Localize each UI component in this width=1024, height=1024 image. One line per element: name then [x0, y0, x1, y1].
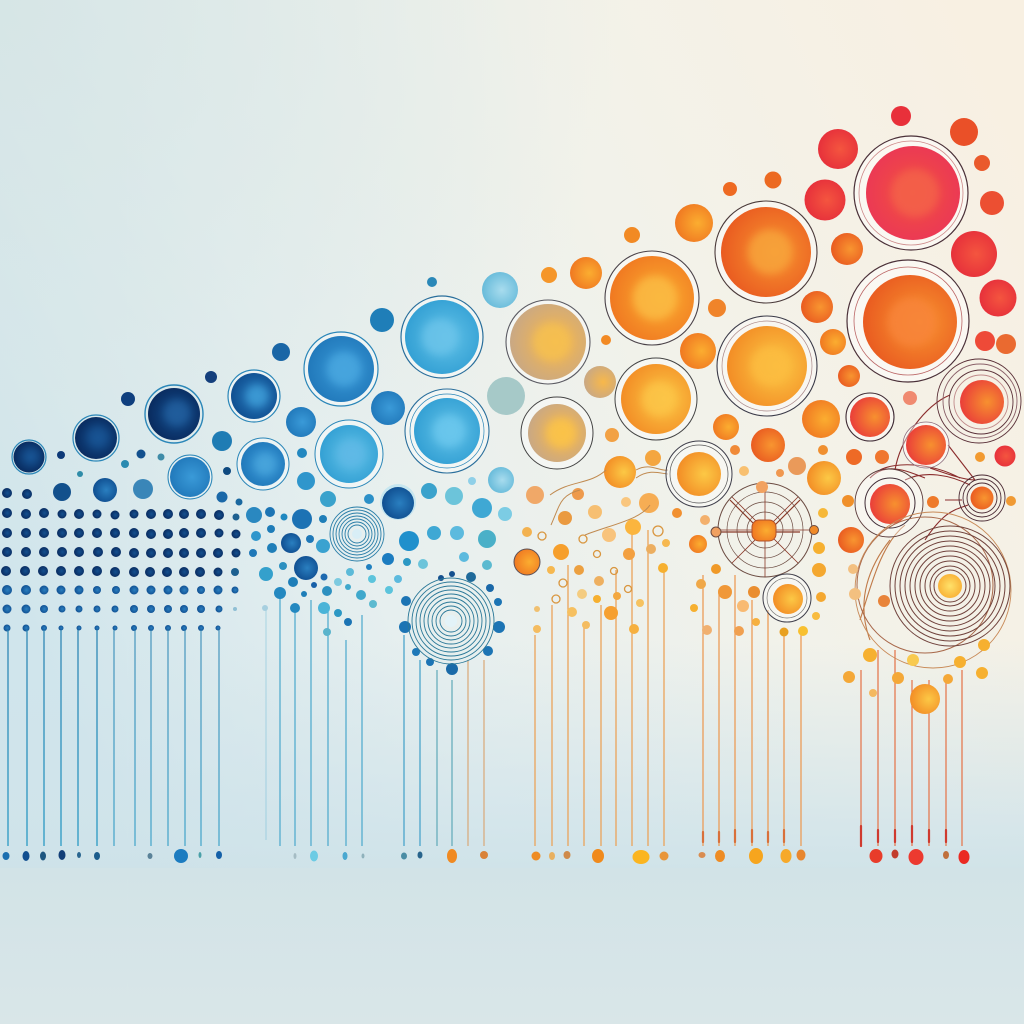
vertical lines: orange group 5	[703, 575, 801, 846]
ring circle navy 3	[145, 385, 203, 443]
ring circle blue 5	[304, 332, 378, 406]
ringed circle: amber lower	[763, 574, 811, 622]
ring circle amber	[521, 397, 593, 469]
scattered dots: gold below spiral	[843, 564, 990, 714]
hollow rings: small orange	[538, 526, 663, 603]
ring circle dark orange 9	[715, 201, 817, 303]
vertical lines: red group 6	[861, 650, 962, 846]
ring circle blue 4	[228, 370, 280, 422]
vertical lines: orange group 4	[535, 530, 664, 846]
bottom drops row	[2, 848, 970, 865]
ringed circle: orange red with loop	[855, 469, 923, 537]
ring circle amber grey 7	[506, 300, 590, 384]
ring circle orange large	[717, 316, 817, 416]
ring circle red orange large	[847, 260, 969, 382]
dot grid: fading blue rows	[2, 585, 238, 632]
ringed circle: red mid	[903, 422, 949, 468]
ring circle red 10	[854, 136, 968, 250]
ring circle mid blue	[237, 438, 289, 490]
ring circle navy 1	[12, 440, 46, 474]
connector curves: red cluster	[850, 395, 975, 640]
vertical lines: blue group 1	[8, 630, 219, 846]
spiral: large blue	[408, 578, 494, 664]
connector curves: orange cluster	[550, 467, 800, 535]
ring circle navy 2	[73, 415, 119, 461]
ring circle sky blue	[405, 389, 489, 473]
ringed circles: navy and blue upper row	[12, 136, 968, 474]
vertical lines: blue group 2	[266, 596, 362, 846]
dot grid: navy matrix	[1, 488, 240, 577]
web wheel node	[711, 481, 818, 577]
ring circle light blue	[315, 420, 383, 488]
ringed circle: orange connector node	[666, 441, 732, 507]
large spiral with glowing centre	[855, 512, 1011, 668]
scattered dots: blue lower cluster	[53, 477, 512, 675]
ring circle orange mid	[615, 358, 697, 440]
scattered dots: blue upper trail	[57, 272, 525, 506]
scattered dots: orange lower cluster	[514, 445, 828, 636]
ring circle deep blue	[168, 455, 212, 499]
vertical lines: blue to orange group 3	[404, 635, 484, 846]
line drips	[703, 826, 946, 846]
ringed circle: small concentric red	[959, 475, 1005, 521]
ring circle orange 8	[605, 251, 699, 345]
ring circle sky 6	[401, 296, 483, 378]
spiral: small blue	[330, 507, 384, 561]
scattered dots: red upper trail	[804, 106, 1016, 553]
ringed circles: second row	[168, 260, 969, 499]
ringed circle: concentric red	[937, 359, 1021, 443]
scattered dots: orange upper trail	[541, 172, 860, 495]
ringed circle: red orange small	[846, 393, 894, 441]
